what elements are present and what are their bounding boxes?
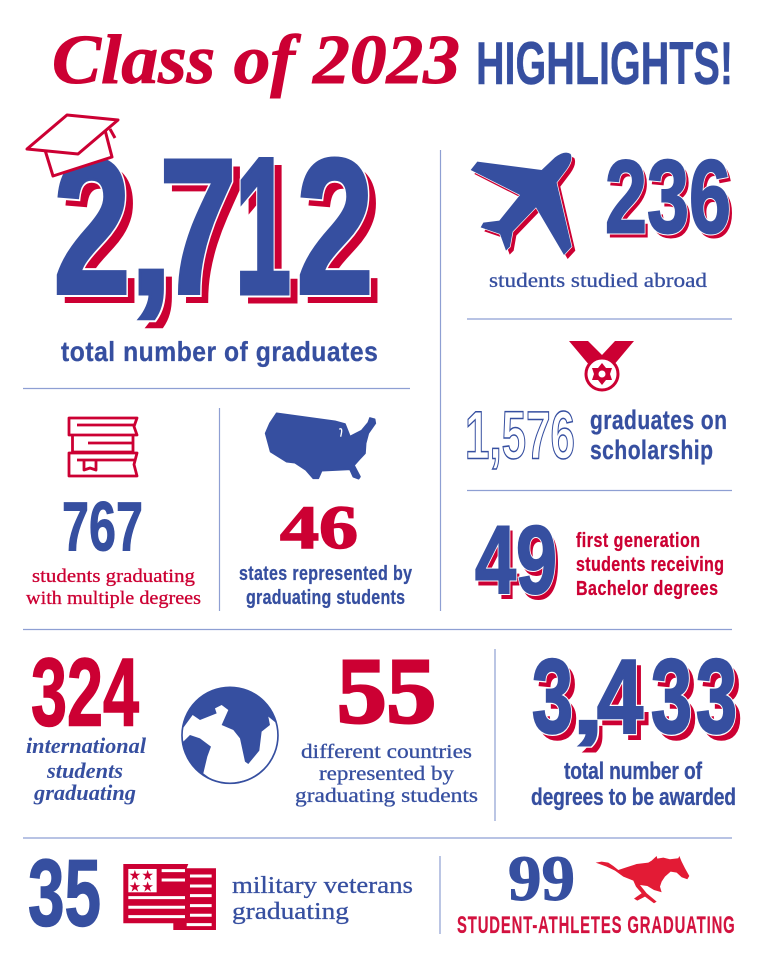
caption: with multiple degrees xyxy=(26,589,201,609)
panel: first generation xyxy=(475,507,724,619)
caption: graduates on xyxy=(590,406,727,436)
number: 3,433: 3 xyxy=(651,638,692,756)
number: 2,712: 2 xyxy=(53,118,131,336)
caption: students studied abroad xyxy=(489,270,707,292)
number: 3,433: , xyxy=(578,667,608,756)
title xyxy=(52,22,733,99)
number: 2,712: 2 xyxy=(304,126,382,344)
icon: medal xyxy=(569,341,634,390)
number: 2,712: 1 xyxy=(235,118,291,335)
number: 99: 99 xyxy=(508,843,575,915)
icon: globe xyxy=(182,687,278,784)
caption xyxy=(590,406,727,466)
number: 49: 49 xyxy=(475,507,557,614)
number: 3,433: 3 xyxy=(696,638,737,756)
number: 2,712: 2 xyxy=(53,118,131,336)
panel: student athletes xyxy=(457,843,735,939)
panel: veterans xyxy=(28,840,413,946)
number: 324: 324 xyxy=(31,640,139,746)
number: 2,712: , xyxy=(137,157,181,336)
number: 49: 49 xyxy=(475,507,557,614)
number: 767: 767 xyxy=(62,488,143,566)
number: 2,712: 7 xyxy=(167,126,245,344)
caption: different countries xyxy=(301,741,472,763)
number: 3,433: 3 xyxy=(701,644,742,762)
number: 236: 236 xyxy=(605,138,731,254)
caption: students receiving xyxy=(576,553,724,575)
number: 46: 46 xyxy=(280,495,358,562)
caption: Bachelor degrees xyxy=(576,577,718,599)
number: 2,712: 2 xyxy=(61,126,139,344)
number: 55: 55 xyxy=(337,640,436,743)
icon: USA map xyxy=(266,413,375,479)
icon: flag: ★ xyxy=(141,879,154,895)
number: 49: 49 xyxy=(478,512,560,619)
number: 2,712: 1 xyxy=(235,118,291,335)
number: 3,433: 4 xyxy=(597,638,643,756)
caption: graduating xyxy=(33,780,136,805)
icon: mustang xyxy=(596,856,689,903)
number: 2,712: , xyxy=(129,149,173,328)
number: 2,712: 1 xyxy=(243,126,299,343)
caption: graduating students xyxy=(295,785,478,807)
caption: military veterans xyxy=(232,872,413,899)
caption: students xyxy=(46,758,123,783)
icon: flag xyxy=(123,864,216,930)
number: 1,576: 1,576 xyxy=(465,398,575,474)
number: 2,712: 7 xyxy=(159,118,237,336)
title: Class of 2023 xyxy=(52,22,460,99)
number: 2,712: 7 xyxy=(159,118,237,336)
caption: STUDENT-ATHLETES GRADUATING xyxy=(457,913,735,939)
number: 35: 35 xyxy=(28,840,101,946)
caption xyxy=(232,872,413,925)
number: 3,433: 3 xyxy=(532,638,573,756)
number: 3,433: 4 xyxy=(597,638,643,756)
icon: flag: ★ xyxy=(141,868,154,884)
number: 2,712 xyxy=(53,118,382,344)
panel: countries xyxy=(295,640,478,807)
panel: studied abroad xyxy=(471,138,734,292)
number: 2,712: 2 xyxy=(296,118,374,336)
number: 3,433: , xyxy=(573,661,603,750)
caption: total number of graduates xyxy=(61,336,378,367)
caption: international xyxy=(26,733,147,758)
panel: states xyxy=(239,413,412,608)
caption: students graduating xyxy=(32,567,195,587)
panel: international xyxy=(26,640,278,805)
icon: flag: ★ xyxy=(129,879,141,895)
number: 3,433: 3 xyxy=(537,644,578,762)
number: 2,712: 2 xyxy=(296,118,374,336)
number: 3,433: 3 xyxy=(696,638,737,756)
icon: flag: ★ xyxy=(129,868,141,884)
number: 3,433 xyxy=(532,638,742,762)
caption xyxy=(239,562,412,608)
caption xyxy=(26,733,147,805)
number: 3,433: 4 xyxy=(602,644,648,762)
caption xyxy=(576,529,724,599)
caption: total number of xyxy=(564,757,703,785)
icon: graduation cap xyxy=(27,115,118,176)
number: 3,433: 3 xyxy=(651,638,692,756)
panel: scholarship xyxy=(465,341,727,474)
caption xyxy=(531,757,736,811)
caption: represented by xyxy=(319,763,454,785)
panel: degrees awarded xyxy=(531,638,742,811)
number: 236: 236 xyxy=(605,138,731,254)
number: 3,433: 3 xyxy=(656,644,697,762)
caption: graduating students xyxy=(246,586,405,608)
caption xyxy=(26,567,201,609)
caption: states represented by xyxy=(239,562,412,584)
caption: graduating xyxy=(232,898,349,925)
caption: scholarship xyxy=(590,436,713,466)
number: 2,712: , xyxy=(129,149,173,328)
number: 3,433: 3 xyxy=(532,638,573,756)
panel: total graduates xyxy=(27,115,382,367)
caption xyxy=(295,741,478,807)
caption: first generation xyxy=(576,529,700,551)
icon: books xyxy=(69,418,137,476)
icon: airplane xyxy=(471,153,575,259)
panel: multiple degrees xyxy=(26,418,201,609)
number: 3,433: , xyxy=(573,661,603,750)
caption: degrees to be awarded xyxy=(531,783,736,811)
number: 236: 236 xyxy=(608,142,734,258)
